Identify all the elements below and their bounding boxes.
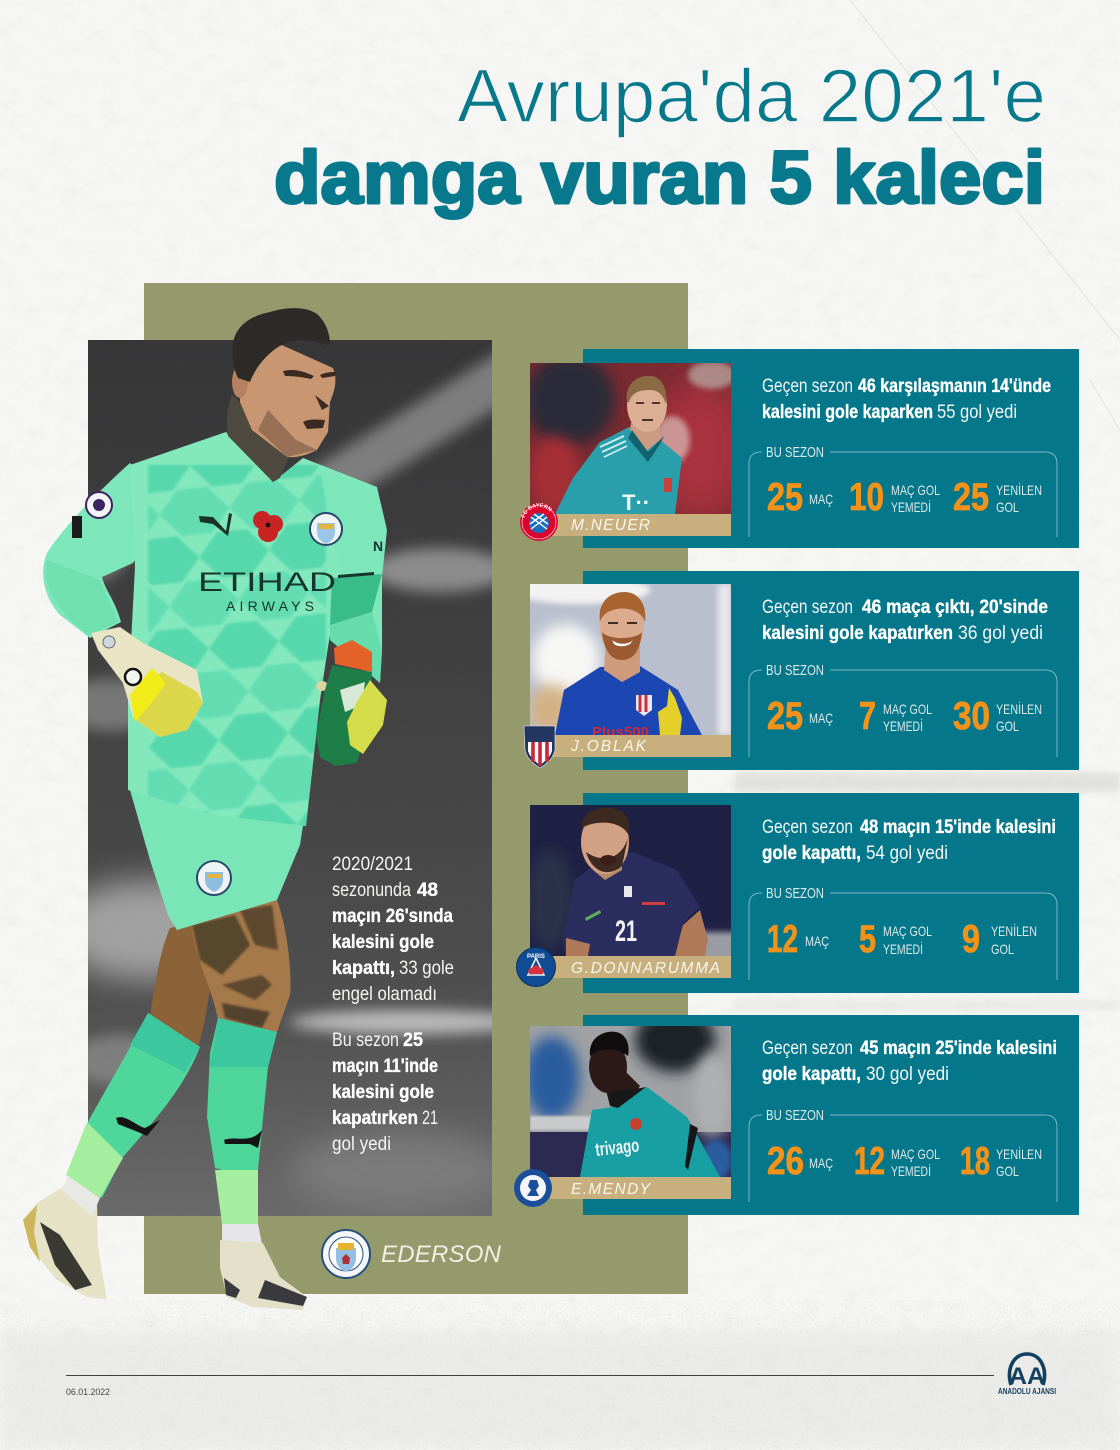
- paragraph one: sezonunda: [332, 880, 411, 901]
- logo: Anadolu Ajansi: AA: [1009, 1363, 1045, 1390]
- beard shade: [258, 410, 317, 457]
- left sock band: [130, 1013, 200, 1072]
- text: Donnarumma last season: [762, 817, 1056, 864]
- stats: Oblak this season: 25: [767, 695, 803, 738]
- text: Oblak last season: 46 maça çıktı, 20'sinde: [862, 597, 1048, 618]
- poppy: [253, 511, 283, 542]
- photo: Mendy: [530, 1026, 731, 1177]
- eyes brows nose and mouth: [283, 370, 336, 429]
- armband and lower arm: [330, 574, 382, 625]
- right boot: [220, 1240, 307, 1310]
- paragraph one: 2020/2021: [332, 854, 413, 875]
- sleeve letter: N: [373, 538, 383, 554]
- text: Mendy last season: 45 maçın 25'inde kalesini: [860, 1038, 1057, 1059]
- neck tattoo: [227, 395, 292, 482]
- paragraph one: 33 gole: [399, 958, 454, 979]
- text: Mendy last season: [762, 1038, 1057, 1085]
- name bar: Donnarumma: G.DONNARUMMA: [571, 960, 720, 977]
- text: Oblak last season: 36 gol yedi: [958, 623, 1043, 644]
- stats: Oblak this season: 7: [859, 695, 876, 738]
- text: Donnarumma last season: gole kapattı,: [762, 843, 861, 864]
- panel: Neuer card: [520, 349, 1079, 548]
- photo: Oblak: [530, 584, 731, 735]
- title line 2: damga vuran 5 kaleci: [274, 136, 1045, 219]
- stats: Oblak this season: BU SEZON: [766, 662, 824, 679]
- stats: Neuer this season: BU SEZON: [766, 444, 824, 461]
- left boot yellow sole: [23, 1205, 40, 1262]
- stats: Donnarumma this season: MAÇ GOL: [883, 923, 932, 939]
- stats: Donnarumma this season: YEMEDİ: [883, 940, 923, 957]
- text: Mendy last season: gole kapattı,: [762, 1064, 861, 1085]
- badge: Bayern: [520, 503, 558, 541]
- stats: Donnarumma this season: [749, 885, 1057, 980]
- left sleeve and forearm: [43, 463, 170, 638]
- left glove: [91, 627, 203, 737]
- badge: Atletico: [524, 726, 555, 768]
- boot ground fade: [20, 1300, 140, 1316]
- torso jersey: [128, 432, 377, 826]
- stats: Neuer this season: YEMEDİ: [891, 498, 931, 515]
- stats: Mendy this season: YENİLEN: [996, 1145, 1042, 1162]
- left glove neon patch: [130, 668, 166, 722]
- name bar: Neuer: [540, 514, 731, 536]
- shorts: [130, 790, 307, 930]
- stats: Neuer this season: 10: [849, 476, 884, 519]
- sock logos: [116, 1117, 262, 1148]
- left boot: [23, 1187, 107, 1300]
- stats: Neuer this season: 25: [767, 476, 803, 519]
- photo: Donnarumma: [526, 805, 740, 962]
- left leg skin: [150, 915, 222, 1048]
- text: Oblak last season: Geçen sezon: [762, 597, 853, 618]
- water bottle: [316, 640, 372, 766]
- panel: Donnarumma card: [516, 793, 1079, 993]
- cuff badge: [103, 636, 115, 648]
- text: Neuer last season: kalesini gole kaparken: [762, 402, 933, 423]
- paragraph two: gol yedi: [332, 1134, 391, 1155]
- stats: Donnarumma this season: BU SEZON: [766, 885, 824, 902]
- ear: [232, 366, 248, 398]
- bottle logo: [340, 682, 365, 712]
- armband dark line: [338, 572, 374, 578]
- stats: Oblak this season: [749, 662, 1057, 757]
- logo: Anadolu Ajansi: ANADOLU AJANSI: [998, 1387, 1056, 1396]
- stats: Oblak this season: MAÇ GOL: [883, 701, 932, 717]
- footer rule: [66, 1375, 994, 1376]
- text: Oblak last season: kalesini gole kapatırken: [762, 623, 953, 644]
- paragraph two: 21: [422, 1108, 438, 1129]
- stats: Oblak this season: YENİLEN: [996, 700, 1042, 717]
- face: [240, 342, 335, 457]
- title line 1: Avrupa'da 2021'e: [457, 54, 1046, 139]
- text: Mendy last season: 30 gol yedi: [866, 1064, 949, 1085]
- stats: Donnarumma this season: MAÇ: [805, 933, 829, 949]
- text: Donnarumma last season: 48 maçın 15'inde kalesini: [860, 817, 1056, 838]
- stats: Donnarumma this season: 5: [859, 918, 876, 961]
- paragraph one: kapattı,: [332, 958, 395, 979]
- panel: Ederson photo background: [88, 340, 492, 1216]
- panel: Mendy card: [514, 1008, 1079, 1215]
- paragraph one: engel olamadı: [332, 984, 437, 1005]
- stats: Donnarumma this season: YENİLEN: [991, 922, 1037, 939]
- stats: Donnarumma this season: 9: [962, 918, 980, 961]
- jersey hex pattern: [148, 465, 326, 827]
- badge: Manchester City: [322, 1230, 370, 1278]
- name bar: Mendy: E.MENDY: [571, 1181, 652, 1198]
- paragraph one: maçın 26'sında: [332, 906, 453, 927]
- text: Ederson stats: [332, 854, 454, 1155]
- jersey puma logo: [199, 513, 232, 536]
- photo: Oblak: Plus500: [592, 724, 649, 739]
- badge: Chelsea: [514, 1169, 552, 1207]
- date: 06.01.2022: [66, 1387, 110, 1397]
- stats: Mendy this season: MAÇ GOL: [891, 1146, 940, 1162]
- right boot dark parts: [224, 1278, 307, 1306]
- right ankle white: [222, 1224, 262, 1244]
- left glove yellow fingers: [130, 672, 203, 737]
- stats: Neuer this season: 25: [953, 476, 989, 519]
- left sock: [67, 1013, 200, 1198]
- paragraph one: 48: [417, 880, 438, 901]
- photo: Mendy: trivago: [594, 1135, 640, 1161]
- right sock light part: [215, 1170, 258, 1224]
- text: Donnarumma last season: Geçen sezon: [762, 817, 853, 838]
- glove badge: [125, 669, 141, 685]
- stats: Mendy this season: MAÇ: [809, 1155, 833, 1171]
- photo: Donnarumma: 21: [615, 915, 637, 948]
- badge: PSG: [516, 948, 556, 986]
- shorts crest: [197, 861, 231, 895]
- right leg tattooed skin: [190, 900, 290, 1032]
- sponsor: Airways: AIRWAYS: [226, 598, 314, 614]
- Premier League patch: [72, 492, 112, 538]
- right sleeve: [320, 470, 387, 683]
- text: Neuer last season: 55 gol yedi: [937, 402, 1017, 423]
- stats: Mendy this season: BU SEZON: [766, 1107, 824, 1124]
- stats: Oblak this season: MAÇ: [809, 710, 833, 726]
- sponsor: Etihad: ETIHAD: [198, 567, 336, 597]
- stats: Neuer this season: MAÇ: [809, 491, 833, 507]
- photo: Neuer: [530, 363, 731, 514]
- badge: PSG: PARIS: [527, 954, 545, 960]
- paragraph two: 25: [403, 1030, 423, 1051]
- left boot dark streak: [40, 1222, 92, 1290]
- text: Neuer last season: 46 karşılaşmanın 14'ünde: [858, 376, 1051, 397]
- stats: Oblak this season: GOL: [996, 718, 1019, 734]
- thumb behind bottle: [316, 681, 328, 691]
- paragraph one: [332, 854, 454, 1005]
- paragraph two: Bu sezon: [332, 1030, 399, 1051]
- name bar: Mendy: [550, 1177, 731, 1199]
- name bar: Oblak: [550, 735, 731, 757]
- panel: Oblak card: [510, 571, 1079, 770]
- paragraph one: kalesini gole: [332, 932, 434, 953]
- left ankle white: [62, 1176, 100, 1216]
- text: Donnarumma last season: 54 gol yedi: [866, 843, 948, 864]
- stats: Mendy this season: 18: [960, 1140, 990, 1183]
- text: Mendy last season: Geçen sezon: [762, 1038, 853, 1059]
- paragraph two: maçın 11'inde: [332, 1056, 438, 1077]
- stats: Donnarumma this season: GOL: [991, 941, 1014, 957]
- figure: goalkeeper Ederson: [20, 308, 387, 1316]
- hair: [233, 308, 330, 382]
- stats: Mendy this season: 12: [854, 1140, 885, 1183]
- stats: Oblak this season: YEMEDİ: [883, 717, 923, 734]
- photo: Neuer: T··: [622, 490, 650, 515]
- stats: Donnarumma this season: 12: [767, 918, 798, 961]
- text: Oblak last season: [762, 597, 1048, 644]
- logo: Anadolu Ajansi: [998, 1354, 1056, 1396]
- right forearm shade: [330, 612, 382, 683]
- name bar: Neuer: M.NEUER: [571, 517, 650, 534]
- right glove: [347, 680, 387, 754]
- text: Neuer last season: Geçen sezon: [762, 376, 853, 397]
- stats: Mendy this season: 26: [767, 1140, 804, 1183]
- stats: Mendy this season: [749, 1107, 1057, 1202]
- left sock light part: [66, 1122, 123, 1198]
- stats: Mendy this season: YEMEDİ: [891, 1162, 931, 1179]
- stats: Neuer this season: YENİLEN: [996, 481, 1042, 498]
- right sock band: [210, 1018, 277, 1067]
- stats: Neuer this season: [749, 444, 1057, 537]
- paragraph two: kalesini gole: [332, 1082, 434, 1103]
- name bar: Donnarumma: [550, 956, 731, 978]
- stats: Neuer this season: GOL: [996, 499, 1019, 515]
- jersey crest: [310, 513, 342, 545]
- leg tattoo: [192, 905, 278, 1028]
- stats: Mendy this season: GOL: [996, 1163, 1019, 1179]
- bottle cap: [334, 640, 372, 672]
- paragraph two: kapatırken: [332, 1108, 418, 1129]
- right sock: [207, 1018, 277, 1170]
- olive backdrop panel: [144, 283, 688, 1294]
- badge: Bayern: FC BAYERN: [521, 503, 552, 518]
- stats: Oblak this season: 30: [953, 695, 990, 738]
- forearm shade: [46, 560, 118, 636]
- text: Neuer last season: [762, 376, 1051, 423]
- name: Ederson: EDERSON: [381, 1241, 502, 1268]
- paragraph two: [332, 1030, 438, 1155]
- title: [274, 54, 1046, 219]
- name bar: Oblak: J.OBLAK: [570, 738, 647, 755]
- stats: Neuer this season: MAÇ GOL: [891, 482, 940, 498]
